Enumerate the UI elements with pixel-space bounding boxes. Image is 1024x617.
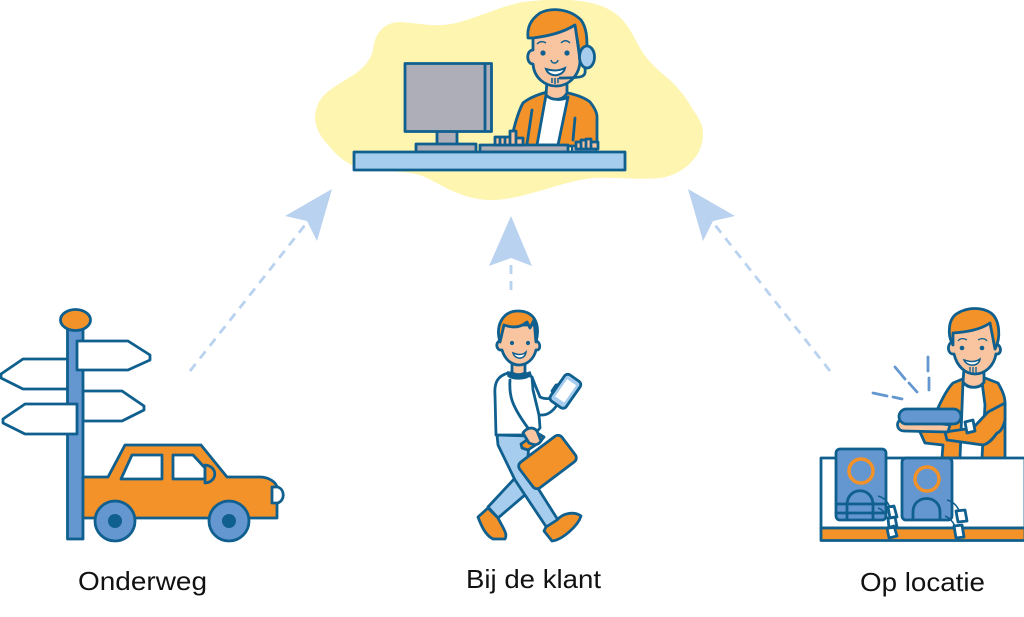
hands bbox=[495, 131, 523, 145]
car bbox=[83, 445, 283, 541]
arrow: middle bbox=[489, 216, 532, 290]
signs behind pole bbox=[1, 359, 68, 389]
head bbox=[497, 311, 540, 374]
person torso bbox=[920, 378, 1005, 458]
product box right bbox=[902, 458, 967, 538]
agent head with headset bbox=[528, 10, 594, 86]
monitor bbox=[405, 64, 492, 152]
agent at computer desk bbox=[354, 10, 625, 170]
pole bbox=[68, 328, 83, 539]
pole knob bbox=[60, 310, 90, 330]
sparkle lines bbox=[873, 357, 929, 399]
briefcase bbox=[517, 428, 578, 491]
sweater bbox=[495, 372, 540, 437]
person at location with products bbox=[821, 308, 1024, 540]
mouse bbox=[572, 146, 596, 152]
back leg bbox=[488, 478, 526, 518]
label: Op locatie: Op locatie bbox=[860, 567, 985, 597]
signs in front of pole bbox=[77, 341, 150, 370]
front leg bbox=[497, 435, 558, 528]
neck collar bbox=[508, 372, 531, 379]
arrow: left bbox=[190, 189, 332, 371]
phone bbox=[548, 373, 582, 410]
person head bbox=[948, 308, 1000, 374]
product box left bbox=[836, 449, 897, 538]
signpost and car bbox=[1, 310, 283, 541]
agent body bbox=[513, 80, 597, 146]
desk bbox=[354, 152, 625, 170]
yellow cloud background bbox=[315, 0, 703, 200]
counter bbox=[821, 458, 1024, 540]
walking person with phone and briefcase bbox=[478, 311, 582, 541]
label: Bij de klant: Bij de klant bbox=[466, 564, 602, 594]
keyboard bbox=[480, 145, 568, 152]
back shoe bbox=[478, 508, 506, 539]
front shoe bbox=[544, 513, 581, 541]
label: Onderweg: Onderweg bbox=[78, 566, 207, 596]
arrow: right bbox=[688, 189, 830, 371]
product held in arms bbox=[897, 409, 975, 433]
